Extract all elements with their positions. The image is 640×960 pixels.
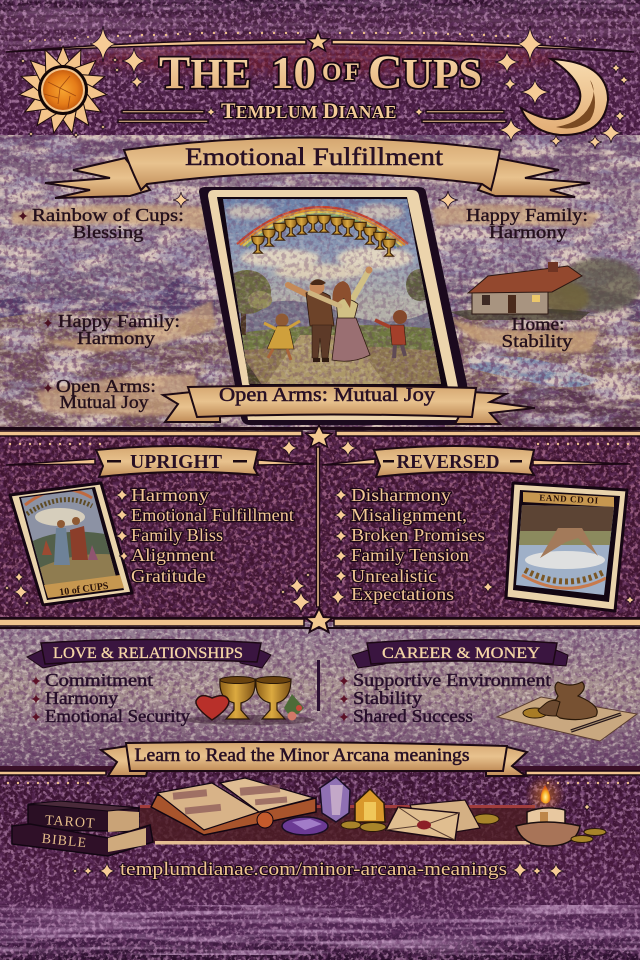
small card: upright bbox=[10, 483, 132, 605]
left label: Happy Family: Harmony bbox=[77, 328, 155, 348]
title: C bbox=[368, 46, 403, 99]
upright list: Harmony bbox=[131, 485, 209, 505]
icon: sun bbox=[18, 46, 108, 135]
card cups arc bbox=[252, 215, 395, 256]
divider band bbox=[0, 766, 640, 775]
banner: UPRIGHT bbox=[6, 446, 314, 477]
banner: UPRIGHT: UPRIGHT bbox=[130, 451, 223, 473]
icon: coin pouch on parchment with pen bbox=[497, 682, 637, 741]
reversed list: Misalignment, bbox=[351, 505, 467, 525]
rainbow bbox=[237, 207, 408, 248]
subtitle with flanking rules: T bbox=[221, 98, 236, 123]
icon: open book bbox=[151, 778, 316, 835]
icon: tarot book: TAROT bbox=[45, 813, 96, 832]
website url: templumdianae.com/minor-arcana-meanings bbox=[120, 860, 507, 880]
dot row footer bbox=[7, 782, 629, 784]
left label: Rainbow of Cups: Blessing bbox=[72, 222, 144, 242]
tree bbox=[234, 270, 272, 335]
love list: Commitment bbox=[45, 670, 153, 690]
sparkles around title bbox=[20, 48, 629, 149]
sparkles beside central card bbox=[173, 191, 458, 209]
career list: Stability bbox=[353, 688, 422, 708]
family figures bbox=[264, 266, 407, 362]
center vertical divider bbox=[317, 660, 320, 711]
reversed list: Broken Promises bbox=[351, 525, 485, 545]
banner: Open Arms: Mutual Joy bbox=[163, 384, 535, 424]
banner: REVERSED: REVERSED bbox=[396, 451, 500, 473]
reversed list bbox=[330, 485, 485, 606]
sparkle clusters bbox=[4, 439, 635, 613]
banner: Open Arms: Mutual Joy: Open Arms: Mutual Joy bbox=[219, 384, 435, 406]
banner: Love and Relationships: LOVE & RELATIONSHIPS bbox=[53, 645, 243, 662]
upright list: Family Bliss bbox=[131, 525, 223, 545]
title: OF bbox=[322, 59, 363, 86]
left label: Open Arms: Open Arms: bbox=[56, 376, 156, 396]
shelf bbox=[140, 805, 535, 844]
right label: Happy Family: Harmony bbox=[489, 222, 567, 242]
banner: REVERSED bbox=[322, 446, 630, 477]
icon: sealed envelope bbox=[386, 800, 480, 840]
career list bbox=[339, 670, 551, 726]
left label: Rainbow of Cups bbox=[18, 205, 184, 242]
left label: Open Arms: Mutual Joy bbox=[60, 392, 148, 412]
panel: love and career background bbox=[0, 622, 640, 772]
icon: golden goblets, heart and flowers bbox=[185, 676, 315, 725]
reversed list: Disharmony bbox=[351, 485, 451, 505]
divider with star bbox=[0, 425, 640, 447]
tarot card: ten of cups bbox=[199, 187, 470, 425]
love list: Emotional Security bbox=[45, 706, 190, 726]
left label: Happy Family bbox=[43, 311, 180, 348]
upright list: Gratitude bbox=[131, 566, 206, 586]
title: T bbox=[159, 47, 190, 99]
subtitle with flanking rules: EMPLUM DIANAE bbox=[236, 98, 397, 123]
right label: Happy Family bbox=[466, 205, 588, 242]
banner: Love and Relationships bbox=[27, 640, 271, 668]
right label: Happy Family: Happy Family: bbox=[466, 205, 588, 225]
left label: Happy Family: Happy Family: bbox=[58, 311, 180, 331]
banner: Learn to Read the Minor Arcana meanings: Learn to Read the Minor Arcana meanings bbox=[134, 745, 469, 766]
left label: Open Arms bbox=[43, 376, 156, 412]
card illustration bbox=[223, 199, 441, 384]
reversed list: Family Tension bbox=[351, 545, 469, 565]
dot row left bbox=[9, 443, 101, 445]
upright list: Alignment bbox=[131, 545, 215, 565]
career list: Supportive Environment bbox=[353, 670, 551, 690]
banner: Career and Money bbox=[352, 640, 568, 668]
upright list bbox=[115, 485, 294, 586]
right label: Home: Home: bbox=[512, 314, 564, 334]
panel: footer background bbox=[0, 770, 640, 960]
love list bbox=[31, 670, 190, 726]
love list: Harmony bbox=[45, 688, 118, 708]
title: 10 bbox=[271, 48, 316, 98]
top ornamental rule bbox=[6, 26, 634, 62]
icon: farmhouse bbox=[450, 258, 640, 320]
divider with star bbox=[0, 608, 640, 632]
website url bbox=[72, 860, 564, 880]
upright list: Emotional Fulfillment bbox=[131, 505, 294, 525]
vertical divider bbox=[316, 447, 320, 607]
small card: reversed: EAND CD OI bbox=[539, 492, 599, 506]
panel: upright and reversed background bbox=[0, 432, 640, 622]
career list: Shared Success bbox=[353, 706, 473, 726]
icon: moon bbox=[521, 59, 608, 135]
right label: Home: Stability bbox=[502, 331, 572, 351]
banner: Emotional Fulfillment: Emotional Fulfillment bbox=[185, 144, 443, 171]
panel: landscape bbox=[0, 135, 640, 432]
subtitle with flanking rules bbox=[118, 98, 506, 123]
card frame bbox=[199, 187, 470, 425]
ribbons behind side labels bbox=[12, 204, 600, 416]
dot row right bbox=[537, 443, 629, 445]
title: UPS bbox=[403, 52, 482, 98]
reversed list: Expectations bbox=[351, 584, 454, 604]
banner: Career and Money: CAREER & MONEY bbox=[382, 645, 540, 662]
right label: Home bbox=[502, 314, 572, 351]
icon: crystals and stones bbox=[282, 777, 499, 835]
small card: reversed bbox=[506, 483, 627, 611]
icon: tarot book bbox=[28, 801, 139, 832]
icon: bible book: BIBLE bbox=[41, 832, 88, 851]
red glow under the top rule bbox=[80, 42, 560, 74]
icon: bible book bbox=[12, 824, 153, 856]
title: HE bbox=[190, 52, 251, 98]
reversed list: Unrealistic bbox=[351, 566, 437, 586]
banner: Emotional Fulfillment bbox=[45, 138, 590, 198]
left label: Rainbow of Cups: Rainbow of Cups: bbox=[32, 205, 184, 225]
banner: Learn to Read the Minor Arcana meanings bbox=[101, 742, 527, 776]
panel: header speckle bbox=[0, 0, 640, 135]
small card: upright: 10 of CUPS bbox=[59, 581, 110, 598]
icon: lit candle bbox=[516, 775, 606, 846]
